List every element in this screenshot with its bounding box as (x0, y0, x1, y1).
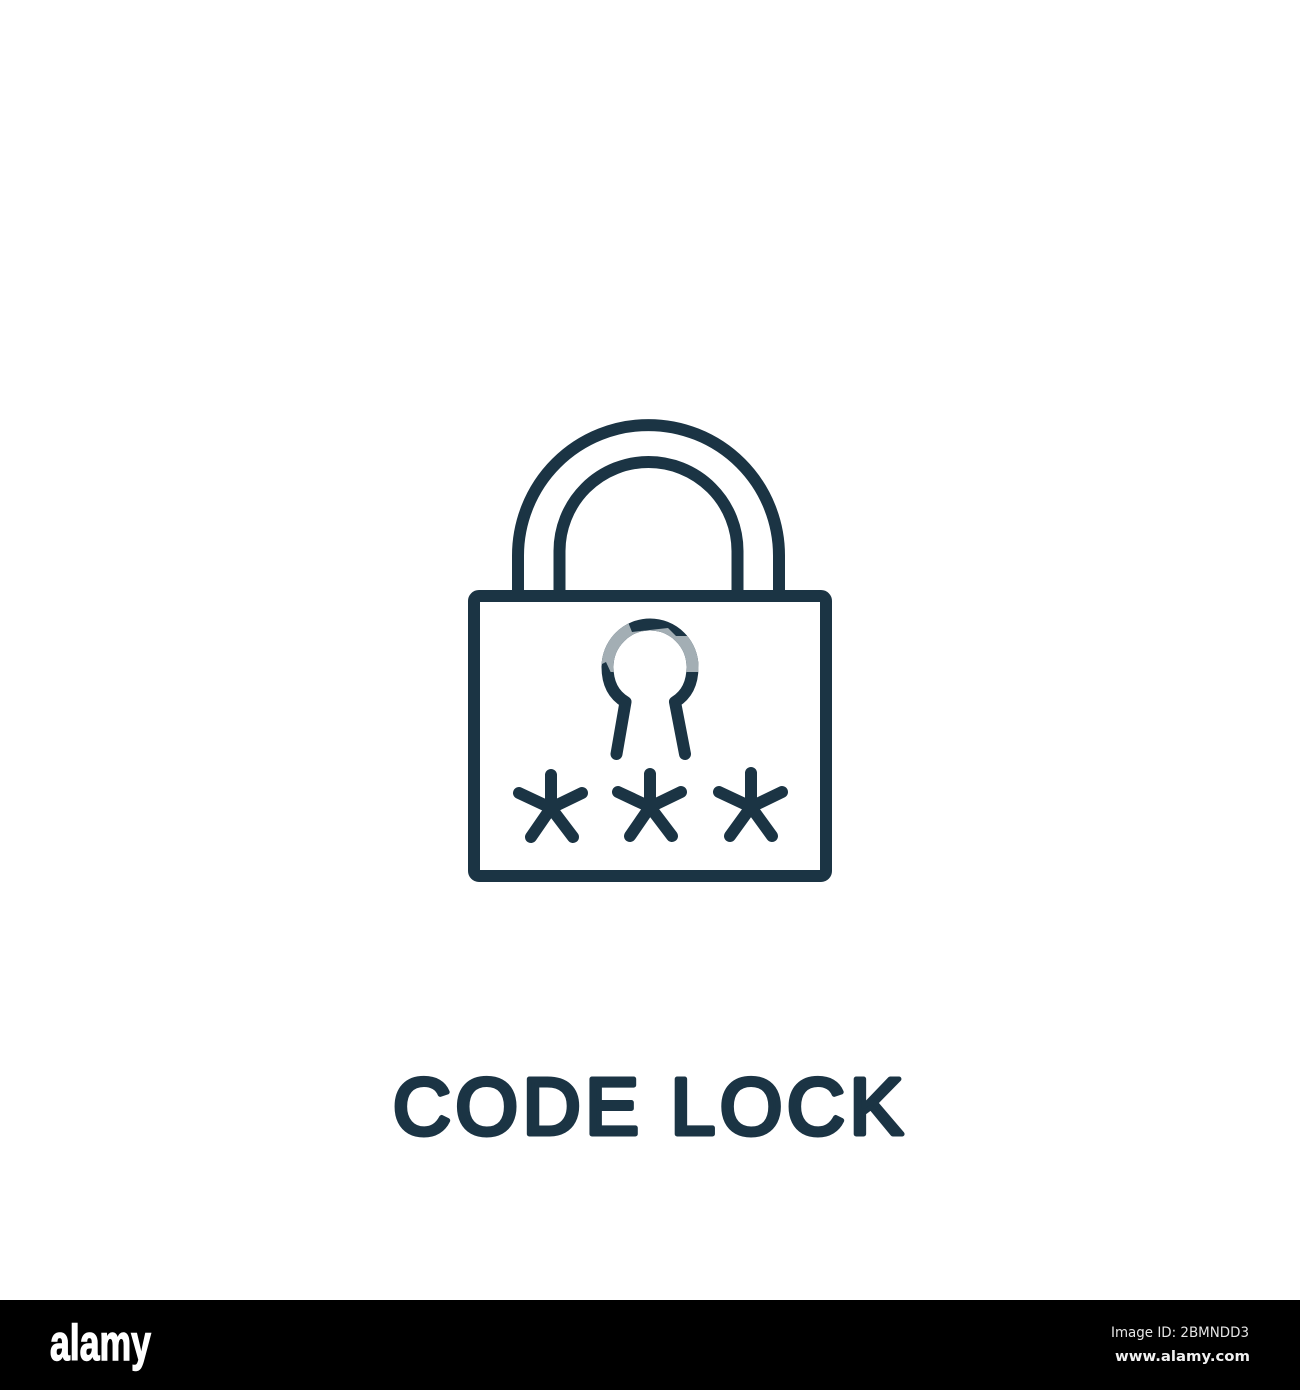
footer logo: alamy (50, 1315, 151, 1371)
asterisk 1 (519, 775, 582, 837)
asterisk 2 (618, 774, 681, 836)
footer bar (0, 1300, 1300, 1390)
keyhole watermark overlay (608, 624, 692, 672)
asterisk 3 (719, 773, 782, 836)
title: CODE LOCK (393, 1062, 903, 1151)
inner shackle (560, 462, 738, 592)
icon: code lock (474, 425, 826, 876)
website: www.alamy.com (1115, 1349, 1250, 1365)
image id: Image ID: 2BMNDD3 (1111, 1325, 1249, 1341)
infographic canvas (0, 419, 1300, 1390)
outer shackle (518, 425, 779, 592)
keyhole (608, 624, 692, 754)
lock body (474, 596, 826, 876)
